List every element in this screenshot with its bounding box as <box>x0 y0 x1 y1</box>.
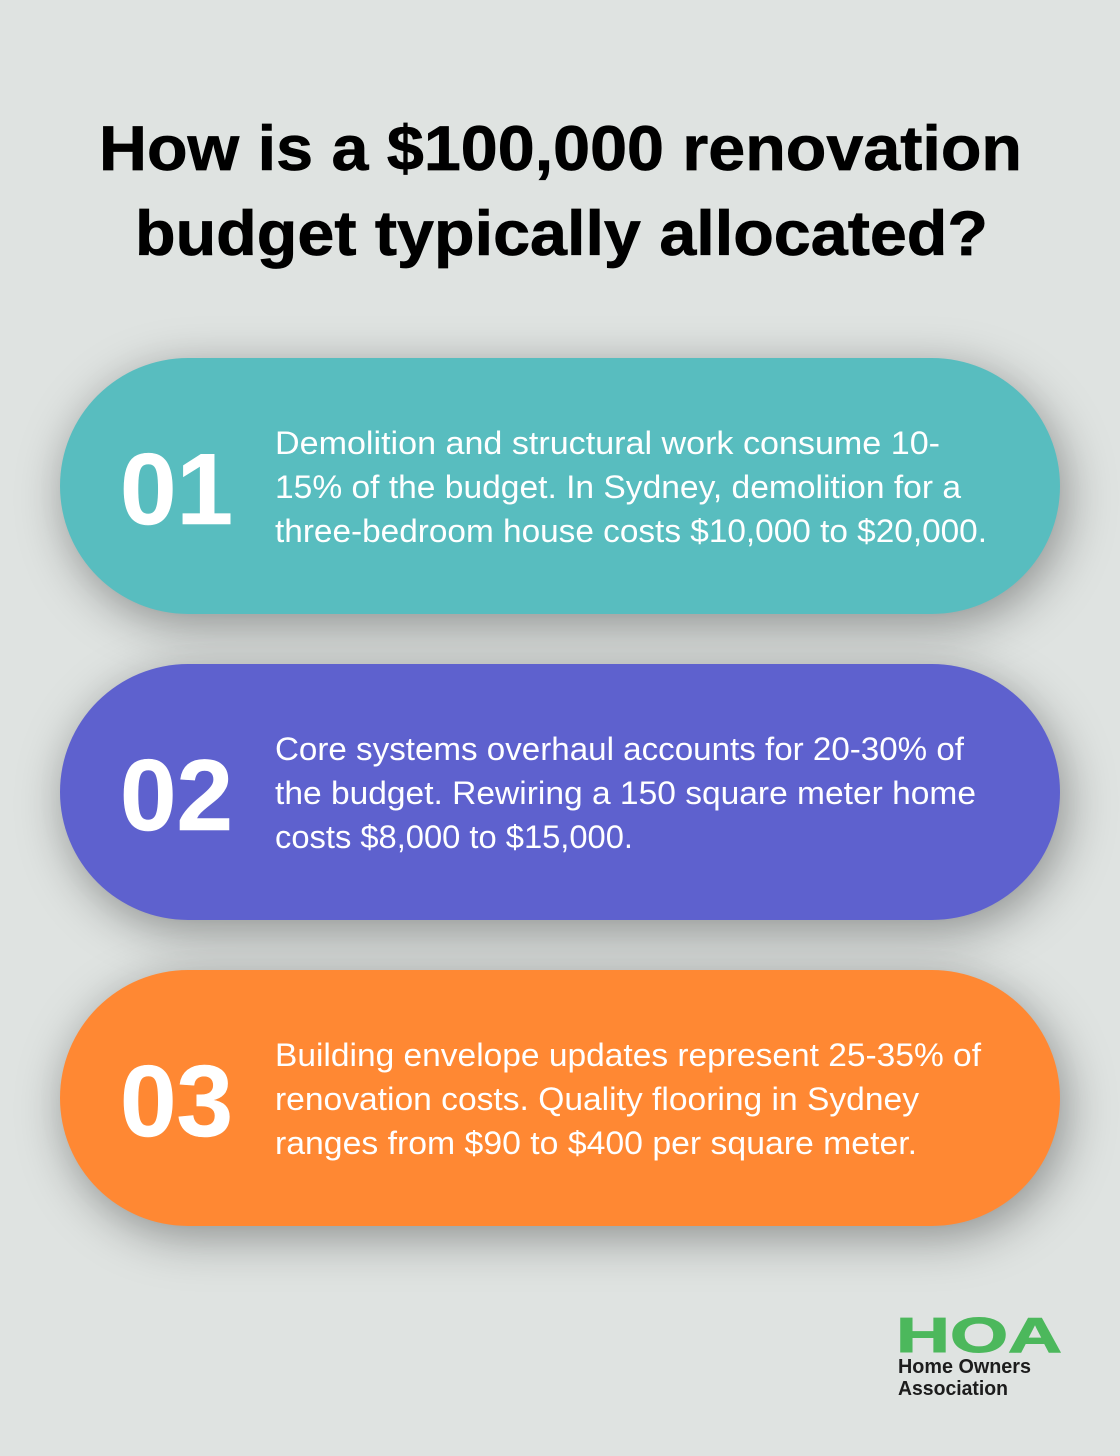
panel: step 02 core systems <box>60 664 1060 920</box>
panel: step 03 building envelope <box>60 970 1060 1226</box>
description 02: Core systems overhaul accounts for 20-30% of <box>275 731 964 767</box>
logo wordmark: Association <box>898 1378 1008 1400</box>
number 02: 02 <box>120 740 233 852</box>
title <box>99 114 1022 269</box>
description 02 <box>275 731 976 855</box>
number 01: 01 <box>120 434 233 546</box>
pill background teal <box>60 358 1060 614</box>
number 03: 03 <box>120 1046 233 1158</box>
description 03: renovation costs. Quality flooring in Sydney <box>275 1081 919 1117</box>
description 01: Demolition and structural work consume 10- <box>275 425 940 461</box>
title: budget typically allocated? <box>135 199 988 269</box>
description 03 <box>275 1037 981 1161</box>
title: How is a $100,000 renovation <box>99 114 1022 184</box>
logo mark HOA: HOA <box>896 1309 1062 1363</box>
description 02: the budget. Rewiring a 150 square meter home <box>275 775 976 811</box>
description 03: Building envelope updates represent 25-35% of <box>275 1037 981 1073</box>
description 03: ranges from $90 to $400 per square meter. <box>275 1125 917 1161</box>
pill background orange <box>60 970 1060 1226</box>
description 01: three-bedroom house costs $10,000 to $20,000. <box>275 513 987 549</box>
logo: HOA Home Owners Association <box>896 1309 1062 1400</box>
logo wordmark: Home Owners <box>898 1356 1031 1378</box>
description 01: 15% of the budget. In Sydney, demolition for a <box>275 469 961 505</box>
logo wordmark <box>898 1356 1031 1400</box>
pill background purple <box>60 664 1060 920</box>
description 01 <box>275 425 987 549</box>
panel: step 01 demolition <box>60 358 1060 614</box>
description 02: costs $8,000 to $15,000. <box>275 819 633 855</box>
